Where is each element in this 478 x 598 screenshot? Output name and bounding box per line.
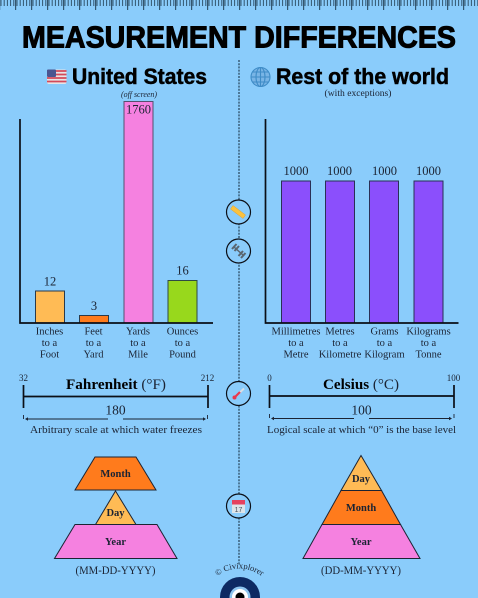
bar: grams to a kilogram (364, 164, 405, 360)
bar: kilograms to a tonne: to a (421, 338, 437, 349)
panel: Fahrenheit scale: 212 (201, 373, 214, 383)
bar: feet to a yard: 3 (91, 299, 97, 313)
bar: inches to a foot: 12 (44, 274, 56, 288)
bar: kilograms to a tonne (406, 164, 451, 360)
bar: feet to a yard (80, 299, 108, 360)
bar: kilograms to a tonne: 1000 (416, 164, 441, 178)
bar: inches to a foot: Inches (36, 326, 63, 338)
icon: US flag (47, 70, 66, 84)
credit text: © Civixplorer (216, 563, 264, 576)
bar: feet to a yard: to a (86, 338, 102, 349)
icon: calendar: 17 (235, 507, 242, 514)
shape: Month: Month (100, 469, 131, 480)
shape: Day: Day (106, 508, 125, 519)
panel: Celsius scale: 100 (351, 402, 372, 418)
bar: grams to a kilogram: Grams (370, 326, 398, 338)
note: off screen: (off screen) (121, 90, 157, 99)
icon: globe (251, 68, 270, 86)
bar chart: United States (20, 102, 213, 360)
bar: millimetres to a metre: 1000 (284, 164, 308, 178)
icon: calendar (226, 494, 250, 518)
bar: kilograms to a tonne: Kilograms (406, 326, 451, 338)
icon: ruler (226, 200, 250, 224)
bar: yards to a mile: Mile (128, 350, 148, 360)
bar: yards to a mile: to a (130, 338, 146, 349)
format label: (DD-MM-YYYY) (321, 565, 401, 577)
title: MEASUREMENT DIFFERENCES (22, 20, 456, 54)
bar: grams to a kilogram: to a (377, 338, 393, 349)
bar: metres to a kilometre: 1000 (327, 164, 352, 178)
icon: evil eye (220, 577, 260, 598)
heading: Rest of the world: Rest of the world (276, 64, 449, 89)
panel: Fahrenheit scale (19, 373, 214, 436)
bar: feet to a yard: Yard (84, 350, 104, 360)
chart axes (20, 119, 213, 323)
panel: Celsius scale: 0 (267, 373, 272, 383)
shape: Month: Month (346, 503, 376, 514)
icon: thermometer (226, 382, 250, 406)
bar: metres to a kilometre: to a (332, 338, 348, 349)
bar: yards to a mile: Yards (126, 326, 150, 338)
shape: Year: Year (350, 537, 372, 548)
credit (216, 563, 264, 598)
panel: Celsius scale (267, 373, 461, 436)
bar: inches to a foot: Foot (40, 350, 59, 360)
bar: ounces to a pound: to a (175, 338, 191, 349)
panel: Celsius scale: Logical scale at which “0” is the base level (267, 425, 456, 436)
bar: yards to a mile (124, 102, 153, 360)
panel: US date format (54, 457, 177, 577)
bar: inches to a foot (36, 274, 64, 360)
shape: Day: Day (352, 474, 371, 485)
bar: grams to a kilogram: Kilogram (364, 350, 405, 360)
bar: millimetres to a metre: Metre (283, 350, 309, 360)
panel: Fahrenheit scale: Arbitrary scale at which water freezes (30, 425, 202, 436)
bar: grams to a kilogram: 1000 (372, 164, 397, 178)
ruler ticks along top edge (0, 3, 478, 5)
panel: Celsius scale: 100 (447, 373, 461, 383)
panel: Celsius scale: Celsius (°C) (323, 377, 399, 393)
bar: ounces to a pound: 16 (176, 264, 189, 278)
bar: inches to a foot: to a (42, 338, 58, 349)
bar: ounces to a pound (167, 264, 198, 360)
bar: yards to a mile: 1760 (126, 102, 151, 116)
bar: millimetres to a metre (272, 164, 320, 360)
bar: ounces to a pound: Pound (169, 350, 197, 360)
bar chart: Rest of the world (266, 119, 458, 360)
shape: Year: Year (105, 537, 126, 548)
panel: world date format (303, 456, 420, 577)
icon: dumbbell (226, 239, 250, 263)
panel: Fahrenheit scale: Fahrenheit (°F) (66, 377, 166, 393)
bar: kilograms to a tonne: Tonne (415, 350, 442, 360)
bar: ounces to a pound: Ounces (167, 326, 198, 338)
format label: (MM-DD-YYYY) (76, 565, 156, 577)
heading: United States: United States (72, 64, 207, 89)
chart axes (266, 119, 458, 323)
bar: millimetres to a metre: Millimetres (272, 326, 320, 338)
bar: metres to a kilometre: Metres (325, 326, 355, 338)
bar: metres to a kilometre: Kilometre (319, 350, 362, 360)
bar: feet to a yard: Feet (84, 326, 103, 338)
bar: millimetres to a metre: to a (288, 338, 304, 349)
panel: Fahrenheit scale: 32 (19, 373, 28, 383)
center dashed divider (238, 60, 240, 565)
bar: metres to a kilometre (319, 164, 362, 360)
note: with exceptions: (with exceptions) (324, 88, 392, 98)
panel: Fahrenheit scale: 180 (105, 402, 126, 418)
